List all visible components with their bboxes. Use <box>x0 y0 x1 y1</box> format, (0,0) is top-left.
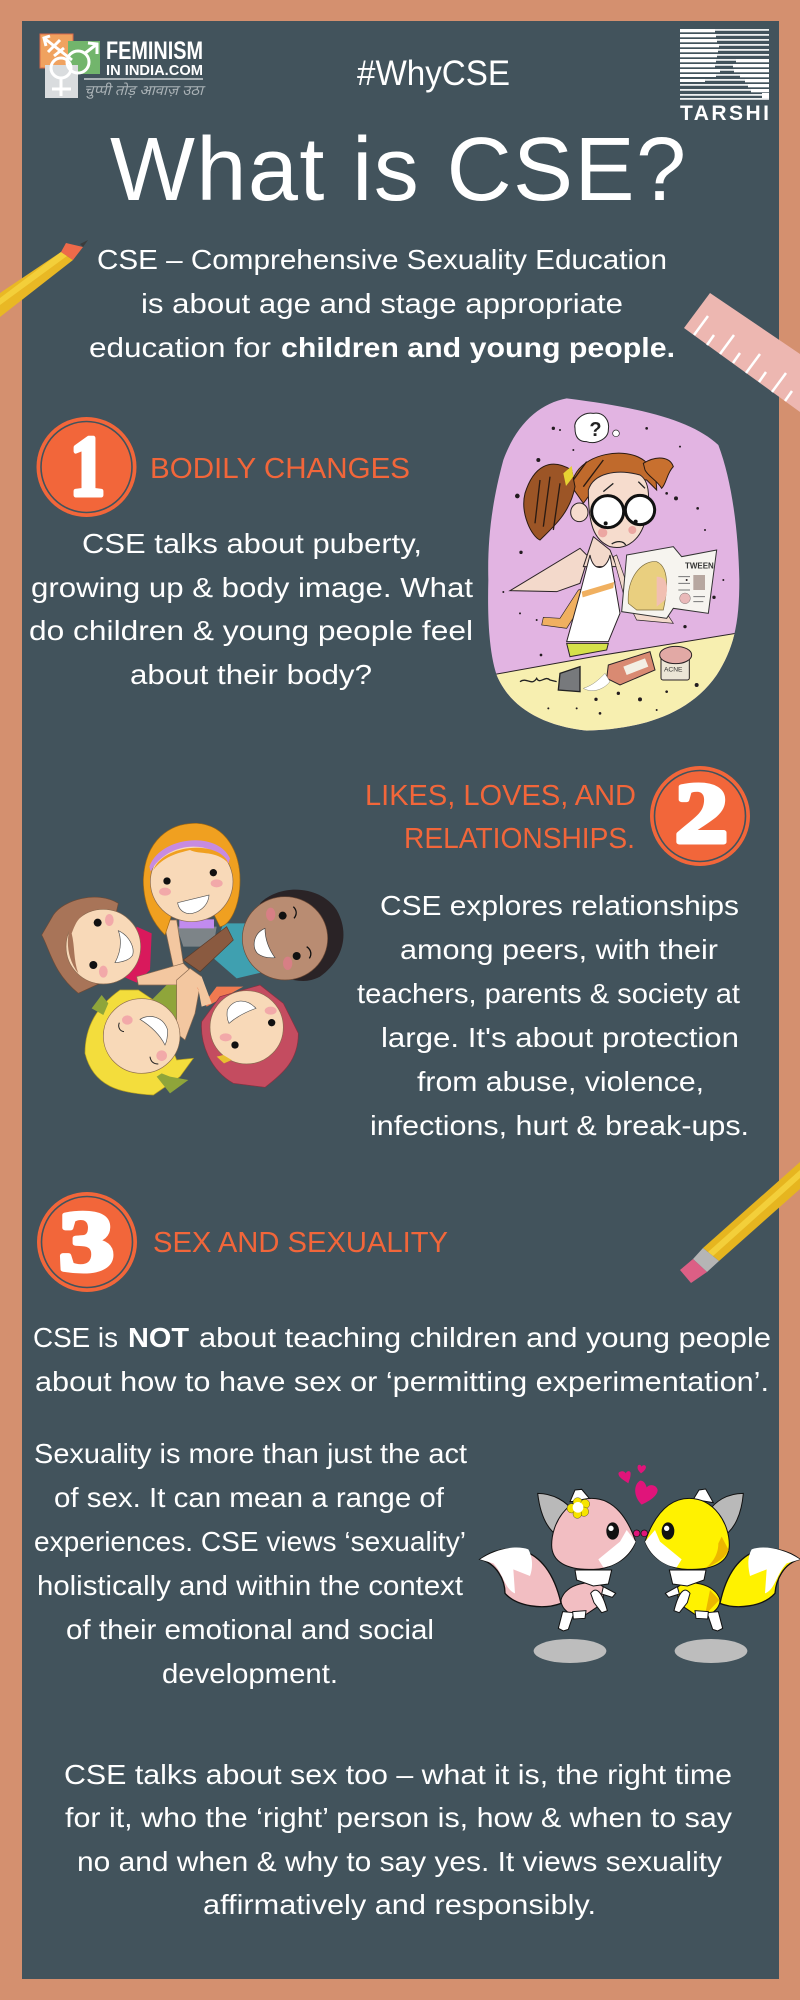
bottom right girl <box>201 985 298 1087</box>
logo: Feminism in India: चुप्पी तोड़ आवाज़ उठा <box>84 82 207 99</box>
bottom left girl <box>85 990 193 1095</box>
section 2 body text: CSE explores relationships <box>380 890 739 921</box>
closing text block: no and when & why to say yes. It views sexuality <box>77 1846 722 1877</box>
arm back and measuring tape <box>510 548 588 592</box>
section 2 heading: RELATIONSHIPS. <box>404 823 635 855</box>
icon: ruler <box>684 293 800 412</box>
section 1 body text: do children & young people feel <box>29 615 473 646</box>
section 3 statement: CSE is <box>33 1322 118 1353</box>
hand and arm to magazine <box>613 555 673 623</box>
section 1 body text: CSE talks about puberty, <box>82 528 422 559</box>
tank top <box>567 555 620 642</box>
illustration: girl with magazine: ? <box>589 419 602 441</box>
sexuality text block: Sexuality is more than just the act <box>34 1438 467 1469</box>
yellow fox head <box>693 1489 713 1503</box>
bodies and arms <box>177 927 217 947</box>
intro text: is about age and stage appropriate <box>141 288 623 319</box>
section 3 statement: about teaching children and young people <box>199 1322 771 1353</box>
flower <box>567 1498 590 1518</box>
icon: pencil right <box>680 1162 800 1283</box>
intro text: CSE – Comprehensive Sexuality Education <box>97 244 667 275</box>
section 2 badge: 2 <box>675 765 728 861</box>
intro text <box>89 244 675 363</box>
logo: Feminism in India: IN INDIA.COM <box>106 62 203 79</box>
sexuality text block <box>34 1438 467 1689</box>
section 3 heading: SEX AND SEXUALITY <box>153 1227 448 1259</box>
closing text block: CSE talks about sex too – what it is, the right time <box>64 1759 732 1790</box>
section 1 badge: 1 <box>70 418 105 514</box>
pink fox tail <box>480 1549 561 1607</box>
logo: Feminism in India <box>40 34 207 99</box>
sexuality text block: experiences. CSE views ‘sexuality’ <box>34 1526 466 1557</box>
section 2 heading: LIKES, LOVES, AND <box>365 780 636 812</box>
sexuality text block: holistically and within the context <box>37 1570 463 1601</box>
logo: TARSHI: TARSHI <box>680 102 769 125</box>
illustration: girl with magazine <box>488 398 747 733</box>
yellow fox tail <box>720 1549 800 1607</box>
section 2 body text: teachers, parents & society at <box>357 978 740 1009</box>
section 3 badge <box>37 1192 137 1292</box>
illustration: girl with magazine: TWEEN <box>685 561 714 570</box>
section 1 badge <box>36 417 136 517</box>
yellow fox body <box>677 1583 720 1616</box>
illustration: kissing foxes <box>480 1465 800 1663</box>
intro text: children and young people. <box>281 332 675 363</box>
sexuality text block: development. <box>162 1658 338 1689</box>
section 3 badge: 3 <box>59 1193 114 1289</box>
section 2 badge <box>650 765 750 866</box>
section 2 body text: infections, hurt & break-ups. <box>370 1110 749 1141</box>
glasses <box>592 496 624 528</box>
section 1 body text: growing up & body image. What <box>31 572 473 603</box>
right boy <box>260 890 343 981</box>
section 3 statement: about how to have sex or ‘permitting experimentation’. <box>35 1366 769 1397</box>
acne cream jar <box>661 657 689 680</box>
logo: Feminism in India: FEMINISM <box>106 37 203 65</box>
section 2 heading <box>365 780 636 855</box>
magazine <box>622 547 717 618</box>
section 2 body text: large. It's about protection <box>381 1022 739 1053</box>
illustration: five children in a circle <box>42 823 343 1095</box>
section 1 body text <box>29 528 473 690</box>
pink fox head <box>570 1489 591 1502</box>
neck <box>583 537 617 567</box>
section 2 body text <box>357 890 749 1141</box>
logo: TARSHI <box>680 29 769 125</box>
thought bubble <box>575 413 609 443</box>
section 1 heading: BODILY CHANGES <box>150 453 410 485</box>
section 1 body text: about their body? <box>130 659 372 690</box>
section 2 body text: from abuse, violence, <box>417 1066 704 1097</box>
section 2 body text: among peers, with their <box>400 934 718 965</box>
left boy <box>42 897 118 993</box>
section 3 statement: NOT <box>128 1322 189 1353</box>
closing text block: affirmatively and responsibly. <box>203 1889 596 1920</box>
closing text block <box>64 1759 732 1920</box>
sexuality text block: of sex. It can mean a range of <box>54 1482 444 1513</box>
sexuality text block: of their emotional and social <box>66 1614 434 1645</box>
icon: pencil top left <box>0 240 88 317</box>
closing text block: for it, who the ‘right’ person is, how & when to say <box>65 1802 732 1833</box>
top girl <box>143 823 240 935</box>
pink fox body <box>561 1583 604 1616</box>
section 3 statement <box>33 1322 771 1397</box>
shorts <box>567 643 608 657</box>
intro text: education for <box>89 332 271 363</box>
hearts <box>635 1481 658 1505</box>
ink specks <box>502 427 724 715</box>
shadows <box>534 1639 606 1663</box>
hashtag: #WhyCSE <box>357 54 510 93</box>
illustration: girl with magazine: ACNE <box>664 667 683 674</box>
head <box>588 472 649 547</box>
title: What is CSE? <box>110 120 686 220</box>
hair <box>572 453 657 503</box>
weighing device <box>558 667 580 692</box>
acne cream tube <box>607 652 655 685</box>
